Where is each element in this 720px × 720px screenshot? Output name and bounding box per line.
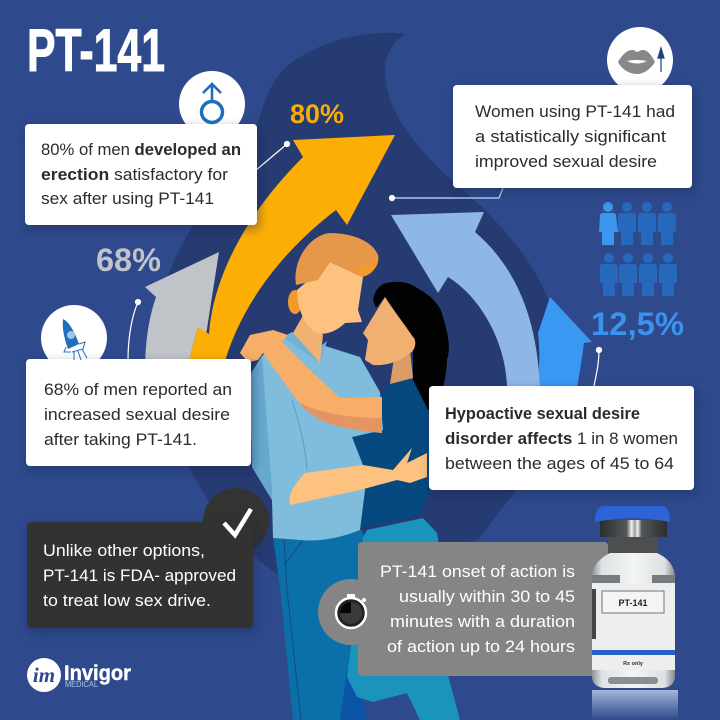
- arrow: bright blue 12.5%: [536, 297, 592, 392]
- text: women desire: improved sexual desire: [475, 152, 657, 171]
- man face: [297, 262, 363, 334]
- icon: lips with arrow: [618, 48, 664, 74]
- woman top: [352, 378, 430, 528]
- panel: FDA approved: [27, 488, 269, 628]
- man hair: [295, 233, 378, 285]
- icon: rocket: [63, 319, 87, 360]
- vial metal collar: [600, 520, 667, 537]
- woman neck: [390, 350, 413, 384]
- title: PT-141: [27, 17, 165, 84]
- text: hypoactive disorder: Hypoactive sexual desire: [445, 404, 640, 423]
- vial: [592, 506, 678, 720]
- man neck: [293, 312, 323, 363]
- vial label: [592, 583, 675, 670]
- man shirt: [250, 337, 383, 541]
- text: FDA approved: to treat low sex drive.: [43, 591, 211, 610]
- flame shape: [156, 33, 560, 580]
- text: FDA approved: [43, 541, 236, 610]
- text: hypoactive disorder: disorder affects 1 in 8 women: [445, 429, 678, 448]
- icon: check mark: [224, 509, 251, 535]
- man jeans: [273, 530, 372, 720]
- man arm around woman: [290, 448, 427, 505]
- stat: 12,5%: 12,5%: [591, 306, 684, 342]
- text: hypoactive disorder: [445, 404, 678, 473]
- text: men erection: sex after using PT-141: [41, 189, 214, 208]
- panel: onset of action: [318, 542, 608, 676]
- arrow: light blue: [391, 212, 540, 392]
- text: men desire: increased sexual desire: [44, 405, 230, 424]
- vial blue cap: [595, 506, 670, 522]
- text: women desire: [475, 102, 675, 171]
- woman arm around man: [240, 330, 382, 433]
- text: men erection: 80% of men developed an: [41, 140, 241, 159]
- text: onset of action: PT-141 onset of action is: [380, 562, 575, 581]
- vial body: [592, 537, 675, 688]
- icon: stopwatch: [336, 594, 366, 628]
- vial reflection: [592, 690, 678, 720]
- arrow: grey 68%: [145, 252, 219, 372]
- text: men desire: [44, 380, 232, 449]
- icon: male symbol: [202, 84, 222, 122]
- text: hypoactive disorder: between the ages of 45 to 64: [445, 454, 674, 473]
- panel: women desire: [453, 27, 692, 188]
- text: FDA approved: PT-141 is FDA- approved: [43, 566, 236, 585]
- logo: im: [33, 663, 55, 687]
- vial: Rx only: [623, 661, 644, 667]
- text: men erection: [41, 140, 241, 208]
- woman trousers: [347, 518, 460, 720]
- panel: men erection: [25, 71, 257, 225]
- stat: 80%: 80%: [290, 99, 344, 129]
- pictogram: 1 in 8 women: [599, 202, 677, 296]
- logo: Invigor: [64, 662, 131, 685]
- stat: 68%: 68%: [96, 242, 161, 278]
- panel: men desire: [26, 305, 251, 466]
- couple illustration: [240, 233, 460, 720]
- vial: PT-141: [618, 598, 648, 608]
- text: women desire: a statistically significant: [475, 127, 666, 146]
- text: men erection: erection satisfactory for: [41, 165, 228, 184]
- logo: MEDICAL: [65, 679, 98, 689]
- text: onset of action: usually within 30 to 45: [399, 587, 575, 606]
- man ear: [288, 290, 302, 314]
- logo: [27, 658, 131, 692]
- text: onset of action: [380, 562, 575, 656]
- text: FDA approved: Unlike other options,: [43, 541, 205, 560]
- arrow: yellow 80%: [186, 135, 395, 372]
- text: onset of action: minutes with a duration: [390, 612, 575, 631]
- text: men desire: after taking PT-141.: [44, 430, 197, 449]
- text: men desire: 68% of men reported an: [44, 380, 232, 399]
- connector lines: [128, 142, 602, 386]
- text: onset of action: of action up to 24 hours: [387, 637, 575, 656]
- panel: hypoactive disorder: [429, 386, 694, 490]
- woman hair: [373, 282, 449, 410]
- woman face: [363, 297, 415, 365]
- text: women desire: Women using PT-141 had: [475, 102, 675, 121]
